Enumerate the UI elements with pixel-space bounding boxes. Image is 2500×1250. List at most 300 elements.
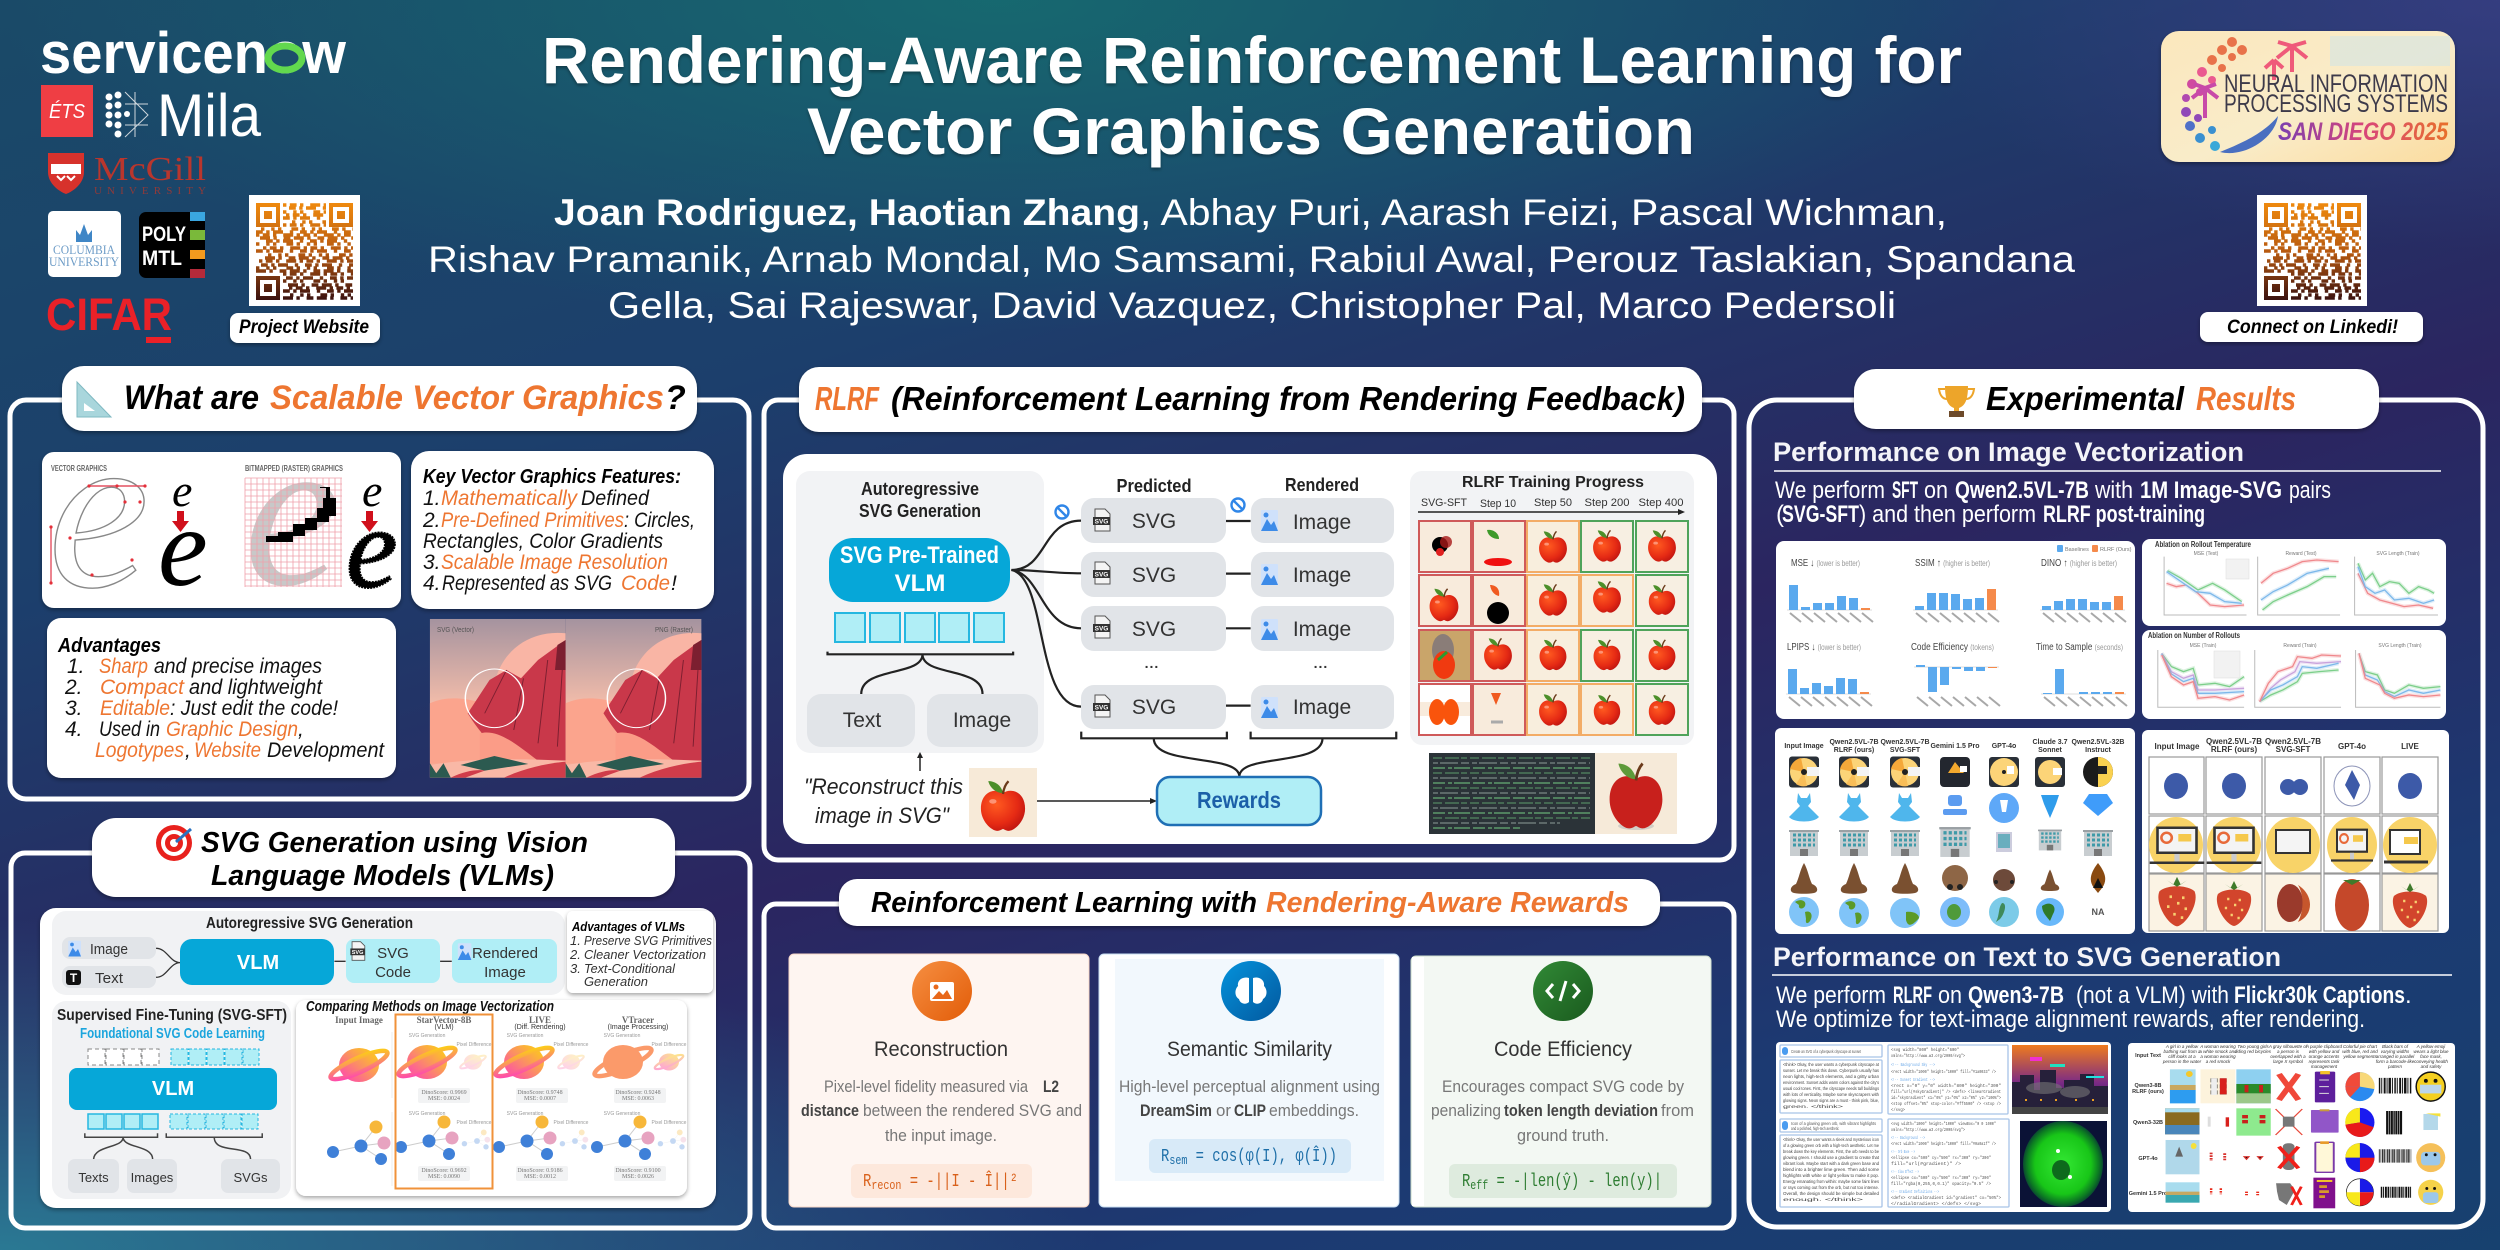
logo: ServiceNow: servicenow: [40, 21, 347, 86]
arrow: apple to rewards: [1037, 798, 1157, 804]
legend: RLRF (Ours): [2100, 547, 2132, 553]
table: text to SVG model comparison: Colorful pie chart: [2343, 1044, 2378, 1049]
card: semantic similarity: embeddings.: [1269, 1101, 1359, 1120]
table: image vectorization illustrations: GPT-4o: [2338, 742, 2366, 751]
card: text to SVG examples with reasoning and code: and a polished, high-tech aesthetic: [1791, 1126, 1840, 1131]
rows: predicted SVG and rendered image: [1056, 498, 1394, 729]
heading: RLRF: RLRF: [815, 380, 880, 417]
image: SVG vs PNG mountain comparison: SVG (Vector): [437, 627, 474, 634]
authors: Gella, Sai Rajeswar, David Vazquez, Christopher Pal, Marco Pedersoli: [608, 285, 1896, 326]
card: vector vs raster diagram: VECTOR GRAPHICS: [51, 464, 107, 473]
card: advantages: Website: [194, 739, 261, 762]
panel: SVG Generation using VLMs: [11, 818, 750, 1228]
image: rendered apple: [1595, 753, 1677, 834]
formula: efficiency reward: = -|len(ŷ) - len(y)|: [1488, 1172, 1662, 1192]
card: reconstruction: Pixel-level fidelity measured via: [824, 1077, 1028, 1096]
card: key vector graphics features: [411, 451, 714, 609]
rows: predicted SVG and rendered image: Image: [1293, 618, 1351, 641]
card: text to SVG examples with reasoning and code: usual cool tones. First, the cityscape needs tall buildings: [1783, 1086, 1880, 1091]
table: text to SVG model comparison: A gray silhouette of: [2268, 1044, 2308, 1049]
diagram: autoregressive SVG generation: [52, 911, 565, 995]
card: text to SVG examples with reasoning and code: highlights with white or light yellow to make it pop.: [1783, 1173, 1879, 1178]
card: advantages: Logotypes: [95, 739, 184, 762]
logo: Mila: Mila: [157, 82, 262, 149]
text: reconstruct prompt: "Reconstruct this: [804, 774, 963, 799]
authors: Rishav Pramanik, Arnab Mondal, Mo Samsami, Rabiul Awal, Perouz Taslakian, Spandana: [428, 239, 2075, 280]
chart: RLRF training progress grid: Step 10: [1480, 498, 1516, 510]
table: image vectorization illustrations: Qwen2.5VL-7B: [2265, 737, 2321, 746]
table: text to SVG model comparison: bathing suit from a: [2163, 1049, 2201, 1054]
card: text to SVG examples with reasoning and code: </svg>: [1891, 1107, 1905, 1113]
title: [542, 23, 1962, 168]
chart: ablation on number of rollouts: Ablation on Number of Rollouts: [2148, 631, 2240, 640]
heading: SVG Generation using VLMs: Language Models (VLMs): [211, 860, 554, 892]
card: comparing methods on image vectorization: DinoScore: 0.9248: [615, 1090, 661, 1096]
heading: Experimental Results: Results: [2196, 380, 2296, 417]
card: advantages: and lightweight: [189, 676, 323, 699]
rows: predicted SVG and rendered image: SVG: [1132, 696, 1176, 719]
chart: RLRF training progress grid: Step 200: [1584, 497, 1630, 509]
text: vectorization description: ) and then perform: [1859, 501, 2036, 528]
arrow: prompt to input: [917, 752, 923, 771]
title: Rendering-Aware Reinforcement Learning for: [542, 23, 1962, 97]
chart: ablation on rollout temperature: Reward (Test): [2285, 551, 2317, 557]
table: text to SVG model comparison: a white smock and: [2199, 1049, 2237, 1054]
logo: Columbia: COLUMBIA: [53, 242, 116, 257]
diagram: supervised fine-tuning: Foundational SVG Code Learning: [80, 1025, 265, 1042]
card: code efficiency: penalizing: [1431, 1101, 1501, 1120]
chart: ablation on number of rollouts: [2142, 630, 2446, 719]
heading: RLRF: [799, 367, 1702, 432]
card: comparing methods on image vectorization: Pixel Difference: [652, 1042, 687, 1048]
logo: NeurIPS San Diego 2025: SAN DIEGO 2025: [2278, 118, 2449, 146]
chart: RLRF training progress grid: Step 50: [1534, 497, 1572, 509]
subheading: image vectorization: Performance on Image Vectorization: [1773, 437, 2244, 467]
column labels: Predicted: [1116, 476, 1192, 496]
diagram: supervised fine-tuning: VLM: [152, 1078, 194, 1100]
logo: McGill: UNIVERSITY: [94, 185, 206, 197]
card: text to SVG examples with reasoning and code: <!-- Glow Effect -->: [1891, 1169, 1919, 1175]
card: reconstruction: L2: [1043, 1077, 1059, 1096]
heading: rendering-aware rewards: [839, 879, 1660, 926]
chart: bar charts of six metrics: LPIPS ↓ (lower is better): [1787, 642, 1861, 653]
card: comparing methods on image vectorization: MSE: 0.0012: [524, 1174, 556, 1180]
card: key vector graphics features: Mathematically: [441, 487, 578, 510]
card: text to SVG examples with reasoning and code: <stop offset="0%" stop-color="#ff5500" /> <stop />: [1891, 1101, 2001, 1107]
heading: Experimental Results: Experimental: [1986, 380, 2185, 417]
card: text to SVG examples with reasoning and code: with lots of verticality. Maybe some skyscrapers with: [1783, 1092, 1879, 1097]
card: comparing methods on image vectorization: Pixel Difference: [554, 1042, 589, 1048]
text: text to SVG description: on: [1938, 982, 1962, 1009]
chart: ablation on number of rollouts: MSE (Train): [2190, 643, 2217, 649]
text: vectorization description: pairs: [2289, 477, 2331, 504]
card: text to SVG examples with reasoning and code: <svg width="800" height="600": [1891, 1047, 1959, 1053]
card: advantages: [47, 618, 396, 778]
card: text to SVG examples with reasoning and code: vibrant look. Maybe start with a dark green base and: [1783, 1161, 1879, 1166]
heading: SVG Generation using VLMs: [92, 818, 675, 897]
formula: semantic reward: = cos(φ(I), φ(Î)): [1187, 1145, 1337, 1167]
card: text to SVG examples with reasoning and code: of a glowing green orb with a high-tech aesthetic. Let me: [1783, 1143, 1879, 1148]
card: advantages: Advantages: [57, 635, 161, 657]
table: text to SVG model comparison: riding red bicycles: [2235, 1049, 2272, 1054]
card: text to SVG examples with reasoning and code: Energy emanating from within: maybe some faint lines: [1783, 1179, 1880, 1184]
card: advantages: 3.: [65, 697, 83, 720]
table: image vectorization icon comparison: Claude 3.7: [2032, 739, 2068, 746]
card: code efficiency: Encourages compact SVG code by: [1442, 1077, 1684, 1096]
card: advantages of VLMs: [567, 911, 713, 993]
box: SVG pre-trained VLM: VLM: [895, 570, 945, 597]
card: comparing methods on image vectorization: VTracer: [622, 1015, 654, 1025]
table: image vectorization illustrations: Input Image: [2155, 742, 2200, 751]
card: advantages of VLMs: Advantages of VLMs: [571, 919, 685, 934]
heading: rendering-aware rewards: Reinforcement Learning with: [871, 887, 1257, 919]
box: rewards: Rewards: [1197, 787, 1281, 813]
text: reconstruct prompt: [804, 774, 963, 828]
text: vectorization description: RLRF post-training: [2043, 501, 2205, 528]
card: comparing methods on image vectorization: MSE: 0.0026: [622, 1174, 654, 1180]
chart: ablation on rollout temperature: MSE (Test): [2194, 551, 2219, 557]
rows: predicted SVG and rendered image: Image: [1293, 564, 1351, 587]
image: cyberpunk cityscape: [2012, 1045, 2108, 1114]
diagram: supervised fine-tuning: SVGs: [234, 1170, 268, 1185]
card: advantages: ,: [298, 718, 304, 741]
card: comparing methods on image vectorization: MSE: 0.0063: [622, 1096, 654, 1102]
logo: Polytechnique Montreal: POLY: [142, 223, 186, 246]
rows: predicted SVG and rendered image: SVG: [1132, 510, 1176, 533]
logo: ETS: [41, 85, 93, 137]
box: SVG pre-trained VLM: SVG Pre-Trained: [840, 542, 999, 569]
table: text to SVG model comparison: person in the water: [2162, 1059, 2202, 1064]
card: advantages: ,: [185, 739, 191, 762]
table: text to SVG model comparison: large X symbol: [2273, 1059, 2304, 1064]
card: comparing methods on image vectorization: MSE: 0.0090: [428, 1174, 460, 1180]
card: comparing methods on image vectorization: SVG Generation: [409, 1033, 446, 1039]
authors: Joan Rodriguez, Haotian Zhang: [554, 192, 1140, 233]
card: text to SVG examples with reasoning and code: blend into a brighter lime green. Then add some: [1783, 1167, 1879, 1172]
button: Project Website: Project Website: [239, 317, 369, 338]
diagram: autoregressive SVG generation: Image: [90, 941, 128, 958]
card: code efficiency: token length deviation: [1504, 1101, 1658, 1120]
table: text to SVG model comparison: conveying health: [2414, 1059, 2448, 1064]
card: text to SVG examples with reasoning and code: xmlns="http://www.w3.org/2000/svg">: [1891, 1053, 1965, 1059]
table: text to SVG model comparison: RLRF (ours): [2132, 1089, 2164, 1095]
diagram: autoregressive SVG generation: SVG: [377, 945, 409, 962]
card: advantages of VLMs: Generation: [584, 974, 648, 989]
diagram: autoregressive generation block: Text: [843, 709, 881, 732]
card: code efficiency: ground truth.: [1517, 1126, 1609, 1145]
card: code efficiency: Code Efficiency: [1494, 1038, 1632, 1061]
image: glowing green orb: [2020, 1121, 2107, 1207]
logo: Polytechnique Montreal: MTL: [142, 247, 182, 270]
card: text to SVG examples with reasoning and code: <ellipse cx="500" cy="500" rx="300" ry="300": [1891, 1175, 1991, 1181]
card: text to SVG examples with reasoning and code: environment. Sunset adds warm colors against the city's: [1783, 1080, 1880, 1085]
card: vector vs raster diagram: BITMAPPED (RASTER) GRAPHICS: [245, 464, 343, 473]
table: text to SVG model comparison: yellow segments: [2342, 1054, 2377, 1059]
card: text to SVG examples with reasoning and code: </radialGradient> </defs> </svg>: [1891, 1201, 1981, 1207]
chart: RLRF training progress grid: SVG-SFT: [1421, 497, 1467, 509]
chart: bar charts of six metrics: Time to Sample (seconds): [2036, 642, 2123, 653]
card: comparing methods on image vectorization: Pixel Difference: [652, 1120, 687, 1126]
rows: predicted SVG and rendered image: ...: [1314, 655, 1328, 671]
text: text to SVG description: Qwen3-7B: [1968, 982, 2064, 1009]
diagram: autoregressive generation block: Image: [953, 709, 1011, 732]
card: comparing methods on image vectorization: [296, 998, 687, 1196]
card: advantages: 1.: [67, 655, 85, 678]
chart: RLRF training progress grid: RLRF Training Progress: [1462, 474, 1644, 491]
text: text to SVG description: We perform: [1776, 982, 1886, 1009]
card: text to SVG examples with reasoning and code: <think> Okay, the user wants a sleek and mysterious icon: [1783, 1137, 1879, 1142]
card: semantic similarity: or: [1216, 1101, 1231, 1120]
card: comparing methods on image vectorization: SVG Generation: [507, 1111, 544, 1117]
top logos: institutions: [40, 21, 347, 343]
card: text to SVG examples with reasoning and code: <think> Okay, the user wants a cyberpunk cityscape at: [1783, 1062, 1880, 1067]
card: text to SVG examples with reasoning and code: <!-- Gradient Definitions -->: [1891, 1189, 1939, 1195]
chart: ablation on number of rollouts: Reward (Train): [2283, 643, 2317, 649]
table: text to SVG model comparison: and safety: [2421, 1064, 2442, 1069]
table: text to SVG model comparison: A purple clipboard: [2305, 1044, 2343, 1049]
card: text to SVG examples with reasoning and code: green. </think>: [1783, 1104, 1844, 1109]
authors: , Abhay Puri, Aarash Feizi, Pascal Wichman,: [1140, 192, 1947, 233]
card: key vector graphics features: !: [671, 572, 677, 595]
card: comparing methods on image vectorization: MSE: 0.0007: [524, 1096, 556, 1102]
icon: brain in blue circle: [1221, 961, 1281, 1021]
card: comparing methods on image vectorization: StarVector-8B: [417, 1015, 471, 1025]
card: key vector graphics features: Pre-Defined Primitives: [441, 509, 624, 532]
table: image vectorization icon comparison: Qwen2.5VL-7B: [1880, 739, 1930, 746]
table: image vectorization illustrations: RLRF (ours): [2211, 745, 2257, 754]
card: text to SVG examples with reasoning and code: xmlns="http://www.w3.org/2000/svg">: [1891, 1127, 1965, 1133]
table: text to SVG model comparison: Two young girls: [2237, 1044, 2269, 1049]
card: reconstruction: Reconstruction: [874, 1038, 1008, 1061]
card: advantages: Sharp: [99, 655, 148, 678]
button: Connect on LinkedIn: Connect on Linkedi!: [2227, 317, 2398, 338]
card: advantages of VLMs: Cleaner Vectorization: [584, 947, 706, 962]
card: advantages: Compact: [100, 676, 185, 699]
box: SVG pre-trained VLM: [829, 538, 1010, 602]
table: text to SVG model comparison: form a barcode-like: [2376, 1059, 2415, 1064]
text: text to SVG description: Flickr30k Captions: [2234, 982, 2405, 1009]
card: reconstruction: between the rendered SVG and: [863, 1101, 1082, 1120]
card: key vector graphics features: 1.: [423, 487, 441, 510]
card: text to SVG examples with reasoning and code: glowing signs. Neon signs are a must - think pink, blue,: [1783, 1098, 1879, 1103]
text: vectorization description: 1M Image-SVG: [2140, 477, 2282, 504]
table: text to SVG model comparison: A woman wearing: [2199, 1044, 2236, 1049]
diagram: autoregressive generation block: [796, 471, 1044, 753]
diagram: autoregressive generation block: SVG Generation: [859, 501, 981, 521]
chart: bar charts of six metrics: MSE ↓ (lower is better): [1791, 558, 1860, 569]
table: text to SVG model comparison: varying widths: [2381, 1049, 2410, 1054]
diagram: supervised fine-tuning: Supervised Fine-Tuning (SVG-SFT): [57, 1007, 287, 1024]
logo: CIFAR: CIFAR: [46, 289, 172, 340]
diagram: autoregressive SVG generation: Rendered: [472, 945, 538, 962]
icon: code brackets in green circle: [1533, 961, 1593, 1021]
rows: predicted SVG and rendered image: SVG: [1132, 618, 1176, 641]
card: advantages: and precise images: [154, 655, 322, 678]
card: comparing methods on image vectorization: DinoScore: 0.9692: [421, 1168, 467, 1174]
legend: [2057, 545, 2132, 553]
card: comparing methods on image vectorization: DinoScore: 0.9100: [615, 1168, 661, 1174]
card: advantages: : Just edit the code!: [170, 697, 338, 720]
panel: Experimental Results: [1749, 369, 2483, 1227]
card: key vector graphics features: Defined: [581, 487, 650, 510]
card: code efficiency: [1411, 956, 1711, 1207]
formula: semantic reward: [1149, 1139, 1351, 1173]
text: vectorization description: (: [1776, 501, 1784, 528]
text: vectorization description: on: [1924, 477, 1948, 504]
text: vectorization description: [1775, 477, 2331, 528]
vector letter e scaled: e: [172, 465, 192, 516]
card: text to SVG examples with reasoning and code: <!-- Sunset Gradient -->: [1891, 1077, 1935, 1083]
card: comparing methods on image vectorization: SVG Generation: [604, 1033, 641, 1039]
card: text to SVG examples with reasoning and code: glowing green. I should use a gradient to create that: [1783, 1155, 1880, 1160]
table: image vectorization icon comparison: Sonnet: [2038, 747, 2063, 754]
card: comparing methods on image vectorization: DinoScore: 0.9748: [517, 1090, 563, 1096]
chart: ablation on number of rollouts: SVG Length (Train): [2378, 643, 2422, 649]
card: semantic similarity: DreamSim: [1140, 1101, 1212, 1120]
card: comparing methods on image vectorization: DinoScore: 0.9969: [421, 1090, 467, 1096]
formula: reconstruction reward: R: [863, 1172, 874, 1192]
column labels: Rendered: [1285, 475, 1359, 495]
diagram: autoregressive SVG generation: Code: [375, 964, 411, 981]
card: advantages of VLMs: Text-Conditional: [584, 961, 676, 976]
connectors: curves and braces: [828, 521, 1396, 777]
text: text to SVG description: [1776, 982, 2412, 1033]
legend: Baselines: [2065, 547, 2089, 553]
logo: Polytechnique Montreal: [139, 212, 205, 278]
rows: predicted SVG and rendered image: Image: [1293, 696, 1351, 719]
chart: ablation on rollout temperature: [2142, 539, 2446, 626]
card: text to SVG examples with reasoning and code: <!-- Orb Base -->: [1891, 1149, 1915, 1155]
heading: What are Scalable Vector Graphics: [62, 366, 697, 431]
card: text to SVG examples with reasoning and code: <!-- Background Sky -->: [1891, 1062, 1935, 1068]
card: comparing methods on image vectorization: Pixel Difference: [457, 1042, 492, 1048]
formula: semantic reward: R: [1161, 1147, 1172, 1167]
logo: NeurIPS San Diego 2025: [2161, 31, 2455, 162]
table: image vectorization illustrations: [2142, 730, 2449, 933]
chart: bar charts of six metrics: SSIM ↑ (higher is better): [1915, 558, 1990, 569]
card: text to SVG examples with reasoning and code: id="skyGradient" x1="0%" y1="0%" x2="0%" y2="100%">: [1891, 1095, 2001, 1101]
table: text to SVG model comparison: wears a light blue: [2413, 1049, 2449, 1054]
raster letter e scaled: e: [346, 485, 398, 613]
card: key vector graphics features: 3.: [423, 551, 441, 574]
panel: Reinforcement Learning with Rendering-Aware Rewards: [764, 879, 1734, 1228]
text: reconstruct prompt: image in SVG": [815, 803, 950, 828]
card: comparing methods on image vectorization: DinoScore: 0.9186: [517, 1168, 563, 1174]
table: image vectorization illustrations: SVG-SFT: [2276, 745, 2310, 754]
logo: Columbia: [48, 211, 121, 277]
card: advantages: Used in: [99, 718, 160, 741]
table: text to SVG model comparison: [2128, 1043, 2455, 1212]
card: comparing methods on image vectorization: SVG Generation: [409, 1111, 446, 1117]
card: key vector graphics features: 2.: [422, 509, 441, 532]
card: comparing methods on image vectorization: (VLM): [434, 1024, 454, 1031]
text: vectorization description: SFT: [1892, 477, 1918, 504]
table: image vectorization icon comparison: Input Image: [1784, 743, 1824, 750]
diagram: autoregressive SVG generation: Autoregressive SVG Generation: [206, 915, 413, 932]
card: key vector graphics features: : Circles,: [624, 509, 695, 532]
text: vectorization description: We perform: [1775, 477, 1885, 504]
table: text to SVG model comparison: Qwen3-32B: [2133, 1120, 2163, 1126]
card: text to SVG examples with reasoning and code: enough. </think>: [1783, 1197, 1864, 1202]
card: code efficiency: from: [1661, 1101, 1694, 1120]
card: text to SVG examples with reasoning and code: <svg width="1000" height="1000" viewBox="0 0 1000": [1891, 1121, 1996, 1127]
diagram: autoregressive SVG generation: VLM: [237, 952, 279, 974]
icon: trophy: [1939, 386, 1974, 417]
text: vectorization description: with: [2094, 477, 2133, 504]
image: SVG vs PNG mountain comparison: [430, 619, 701, 778]
text: text to SVG description: (not a VLM) with: [2076, 982, 2229, 1009]
card: advantages of VLMs: Preserve SVG Primitives: [584, 933, 712, 948]
card: text to SVG examples with reasoning and code: Icon of a glowing green orb, with vibrant highlights: [1791, 1121, 1877, 1126]
button: Project Website: [230, 313, 380, 343]
card: text to SVG examples with reasoning and code: Overall, the design should be simple but detailed: [1783, 1191, 1879, 1196]
text: text to SVG description: We optimize for text-image alignment rewards, after rendering.: [1776, 1006, 2365, 1033]
card: reconstruction: [789, 954, 1089, 1207]
heading: rendering-aware rewards: Rendering-Aware Rewards: [1266, 887, 1629, 919]
card: comparing methods on image vectorization: Pixel Difference: [554, 1120, 589, 1126]
table: text to SVG model comparison: management: [2311, 1064, 2338, 1069]
raster letter e scaled: e: [362, 465, 382, 516]
subheading: text to SVG: Performance on Text to SVG Generation: [1773, 942, 2281, 972]
table: text to SVG model comparison: Black bars of: [2382, 1044, 2409, 1049]
image: SVG vs PNG mountain comparison: PNG (Raster): [655, 627, 693, 634]
heading: What are Scalable Vector Graphics: Scalable Vector Graphics: [270, 379, 664, 417]
card: text to SVG examples with reasoning and code: or rays coming out from the orb, but not too intense.: [1783, 1185, 1879, 1190]
table: text to SVG model comparison: face mask,: [2420, 1054, 2442, 1059]
card: text to SVG examples with reasoning and code: fill="url(#skyGradient)" /> <defs> <linearGradient: [1891, 1089, 2001, 1095]
diagram: autoregressive SVG generation: Image: [484, 964, 526, 981]
logo: ETS: ÉTS: [49, 100, 86, 123]
chart: RLRF training progress grid: [1410, 471, 1694, 745]
table: image vectorization icon comparison: Qwen2.5VL-32B: [2072, 739, 2124, 746]
text: vectorization description: SVG-SFT: [1782, 501, 1859, 528]
table: text to SVG model comparison: A yellow emoji: [2416, 1044, 2446, 1049]
table: text to SVG model comparison: Qwen3-8B: [2135, 1083, 2161, 1089]
card: key vector graphics features: Scalable Image Resolution: [441, 551, 668, 574]
image: input apple: [969, 768, 1037, 837]
table: text to SVG model comparison: arranged in parallel: [2376, 1054, 2415, 1059]
table: image vectorization illustrations: LIVE: [2401, 742, 2420, 751]
logo: Columbia: UNIVERSITY: [49, 254, 120, 269]
logo: McGill: McGill: [94, 151, 206, 188]
card: advantages of VLMs: 1.: [570, 933, 581, 948]
card: comparing methods on image vectorization: Input Image: [335, 1015, 383, 1025]
card: text to SVG examples with reasoning and code: fill="url(#gradient)" />: [1891, 1161, 1961, 1167]
table: image vectorization icon comparison: SVG-SFT: [1890, 747, 1921, 754]
table: image vectorization icon comparison: Gemini 1.5 Pro: [1930, 743, 1980, 750]
image: generated SVG code: [1429, 753, 1595, 834]
card: vector vs raster diagram: [42, 384, 401, 636]
card: comparing methods on image vectorization: SVG Generation: [604, 1111, 641, 1117]
card: text to SVG examples with reasoning and code: Create an SVG of a cyberpunk cityscape at sunset: [1791, 1049, 1862, 1054]
heading: RLRF: (Reinforcement Learning from Rendering Feedback): [891, 380, 1685, 417]
table: image vectorization icon comparison: NA: [2092, 907, 2105, 917]
panel: What are Scalable Vector Graphics: [10, 366, 749, 799]
heading: What are Scalable Vector Graphics: ?: [665, 379, 686, 417]
chart: bar charts of six metrics: [1776, 541, 2135, 719]
card: text to SVG examples with reasoning and code: neon lights, high-tech elements, and a gritty urban: [1783, 1074, 1879, 1079]
card: comparing methods on image vectorization: (Diff. Rendering): [514, 1024, 566, 1031]
table: text to SVG model comparison: cliff looks at a: [2168, 1054, 2196, 1059]
card: key vector graphics features: Represented as SVG: [442, 572, 612, 595]
vector outline letter e: e: [48, 384, 149, 636]
diagram: autoregressive SVG generation: T: [70, 971, 78, 985]
formula: efficiency reward: eff: [1470, 1178, 1488, 1193]
card: text to SVG examples with reasoning and code: sunset. Let me break this down. Cyberpunk usually has: [1783, 1068, 1880, 1073]
diagram: autoregressive SVG generation: Text: [95, 970, 124, 987]
heading: SVG Generation using VLMs: SVG Generation using Vision: [201, 827, 588, 859]
card: comparing methods on image vectorization: MSE: 0.0024: [428, 1096, 460, 1102]
